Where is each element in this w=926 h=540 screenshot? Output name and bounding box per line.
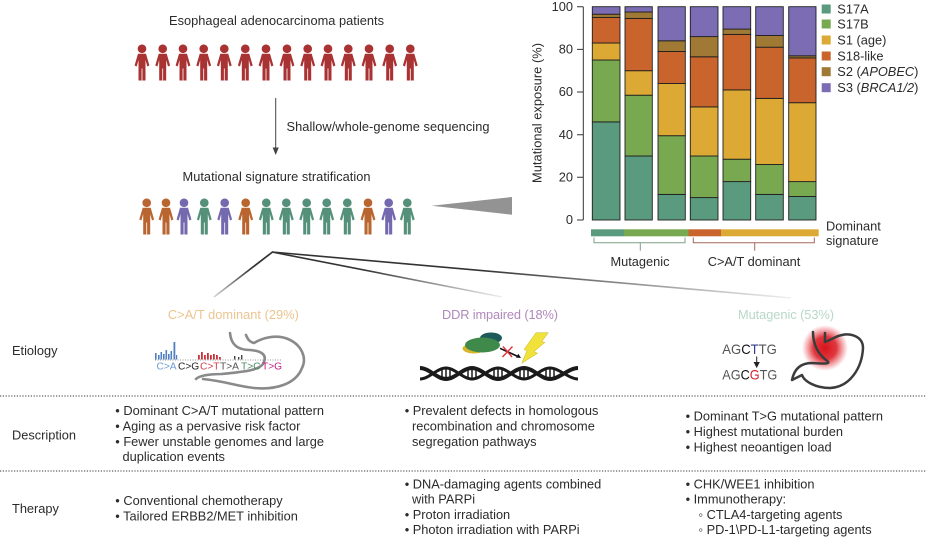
bracket: C>A/T dominant: [693, 238, 814, 251]
mutation class labels: C>G: [178, 362, 199, 372]
therapy: C>A/T dominant: • Conventional chemotherapy: [115, 493, 283, 508]
heading: patients: Esophageal adenocarcinoma patients: [169, 13, 384, 28]
legend: S18-like: [837, 48, 884, 64]
y axis tick labels: 40: [559, 127, 573, 142]
description: mutagenic: • Highest neoantigen load: [686, 440, 832, 454]
label: mutagenic group: Mutagenic: [610, 254, 670, 269]
legend: S3 (BRCA1/2): [837, 80, 918, 95]
fan lines to subtypes: [214, 252, 791, 298]
lightning bolt: [522, 333, 548, 363]
row label: etiology: Etiology: [12, 343, 58, 358]
therapy: DDR impaired: • Proton irradiation: [405, 507, 510, 522]
y axis tick labels: 20: [559, 170, 573, 184]
row label: description: Description: [12, 428, 76, 443]
row label: therapy: Therapy: [12, 501, 60, 516]
heading: stratification: Mutational signature stratification: [182, 169, 370, 184]
mutation class labels: C>T: [200, 362, 220, 372]
substitution arrow: [754, 356, 759, 367]
wedge linking patients to chart: [432, 197, 512, 215]
label: C>A/T dominant group: C>A/T dominant: [708, 254, 801, 269]
therapy: mutagenic: • CHK/WEE1 inhibition: [686, 476, 815, 491]
arrow: sequencing step: [273, 98, 279, 155]
bar 4: [690, 7, 718, 220]
heading: DDR impaired subtype: DDR impaired (18%): [442, 307, 558, 322]
description: mutagenic: • Dominant T>G mutational pattern: [686, 409, 883, 424]
description: DDR impaired: segregation pathways: [412, 434, 536, 449]
heading: mutagenic subtype: Mutagenic (53%): [738, 307, 834, 322]
legend: S17A: [837, 2, 869, 16]
blocked arrow: [500, 348, 518, 356]
legend: S1 (age): [837, 32, 886, 48]
stacked bar chart: [530, 0, 816, 227]
patient row: unstratified: [135, 44, 418, 80]
description: C>A/T dominant: • Dominant C>A/T mutational pattern: [115, 403, 324, 418]
mutation class labels: T>C: [241, 362, 261, 372]
description: C>A/T dominant: • Fewer unstable genomes and large: [115, 434, 324, 449]
y axis tick labels: 60: [559, 84, 573, 99]
mutation class labels: [156, 362, 282, 372]
label: dominant signature: [826, 219, 881, 248]
therapy: DDR impaired: • Photon irradiation with PARPi: [405, 522, 580, 537]
bar 3: [658, 7, 685, 220]
legend: [822, 2, 918, 95]
description: mutagenic: • Highest mutational burden: [686, 424, 843, 439]
sequence after: AGCGTG: [722, 367, 777, 382]
stomach outline: [196, 333, 304, 388]
y axis: [577, 7, 583, 220]
icon: T>G substitution with stomach: [722, 325, 863, 388]
y axis tick labels: [552, 0, 573, 227]
DNA helix: [420, 368, 578, 379]
dominant signature strip: [591, 229, 819, 236]
row divider: [0, 470, 926, 472]
sequence before: AGCTTG: [722, 342, 777, 357]
y axis tick labels: 80: [559, 42, 573, 57]
y axis title: Mutational exposure (%): [530, 43, 544, 183]
icon: DNA repair defect: [420, 332, 578, 379]
label: dominant signature: Dominant: [826, 219, 881, 234]
therapy: mutagenic: • Immunotherapy:: [686, 492, 786, 506]
mutation class labels: T>A: [220, 362, 239, 372]
legend: S17B: [837, 16, 869, 32]
protein complex: [462, 344, 486, 354]
label: dominant signature: signature: [826, 233, 879, 248]
description: C>A/T dominant: • Aging as a pervasive risk factor: [115, 418, 301, 434]
bar 5: [723, 7, 751, 220]
patient row: stratified by signature: [139, 198, 415, 234]
mutation class labels: C>A: [156, 362, 177, 372]
therapy: DDR impaired: with PARPi: [411, 492, 475, 506]
description: DDR impaired: recombination and chromosome: [412, 418, 595, 434]
stomach outline: [792, 332, 863, 388]
row divider: [0, 395, 926, 397]
description: C>A/T dominant: duplication events: [122, 449, 225, 464]
label: sequencing: Shallow/whole-genome sequencing: [286, 119, 490, 134]
heading: C>A/T dominant subtype: C>A/T dominant (29%): [168, 307, 299, 322]
therapy: mutagenic: ◦ CTLA4-targeting agents: [698, 507, 842, 522]
bar 6: [756, 7, 783, 220]
therapy: C>A/T dominant: • Tailored ERBB2/MET inhibition: [115, 508, 298, 524]
bar 2: [625, 7, 652, 220]
legend: S2 (APOBEC): [837, 64, 918, 79]
bracket: mutagenic: [594, 238, 685, 251]
y axis tick labels: 0: [566, 212, 573, 227]
bar 1: [592, 7, 620, 220]
icon: stomach with mutation spectrum: [155, 333, 304, 388]
bar 7: [789, 7, 816, 220]
mutation class labels: T>G: [262, 362, 282, 372]
therapy: DDR impaired: • DNA-damaging agents combined: [405, 476, 601, 491]
description: DDR impaired: • Prevalent defects in homologous: [405, 403, 598, 418]
spectrum peaks: [155, 342, 177, 360]
therapy: mutagenic: ◦ PD-1\PD-L1-targeting agents: [698, 522, 872, 537]
tumour glow: [802, 325, 848, 371]
